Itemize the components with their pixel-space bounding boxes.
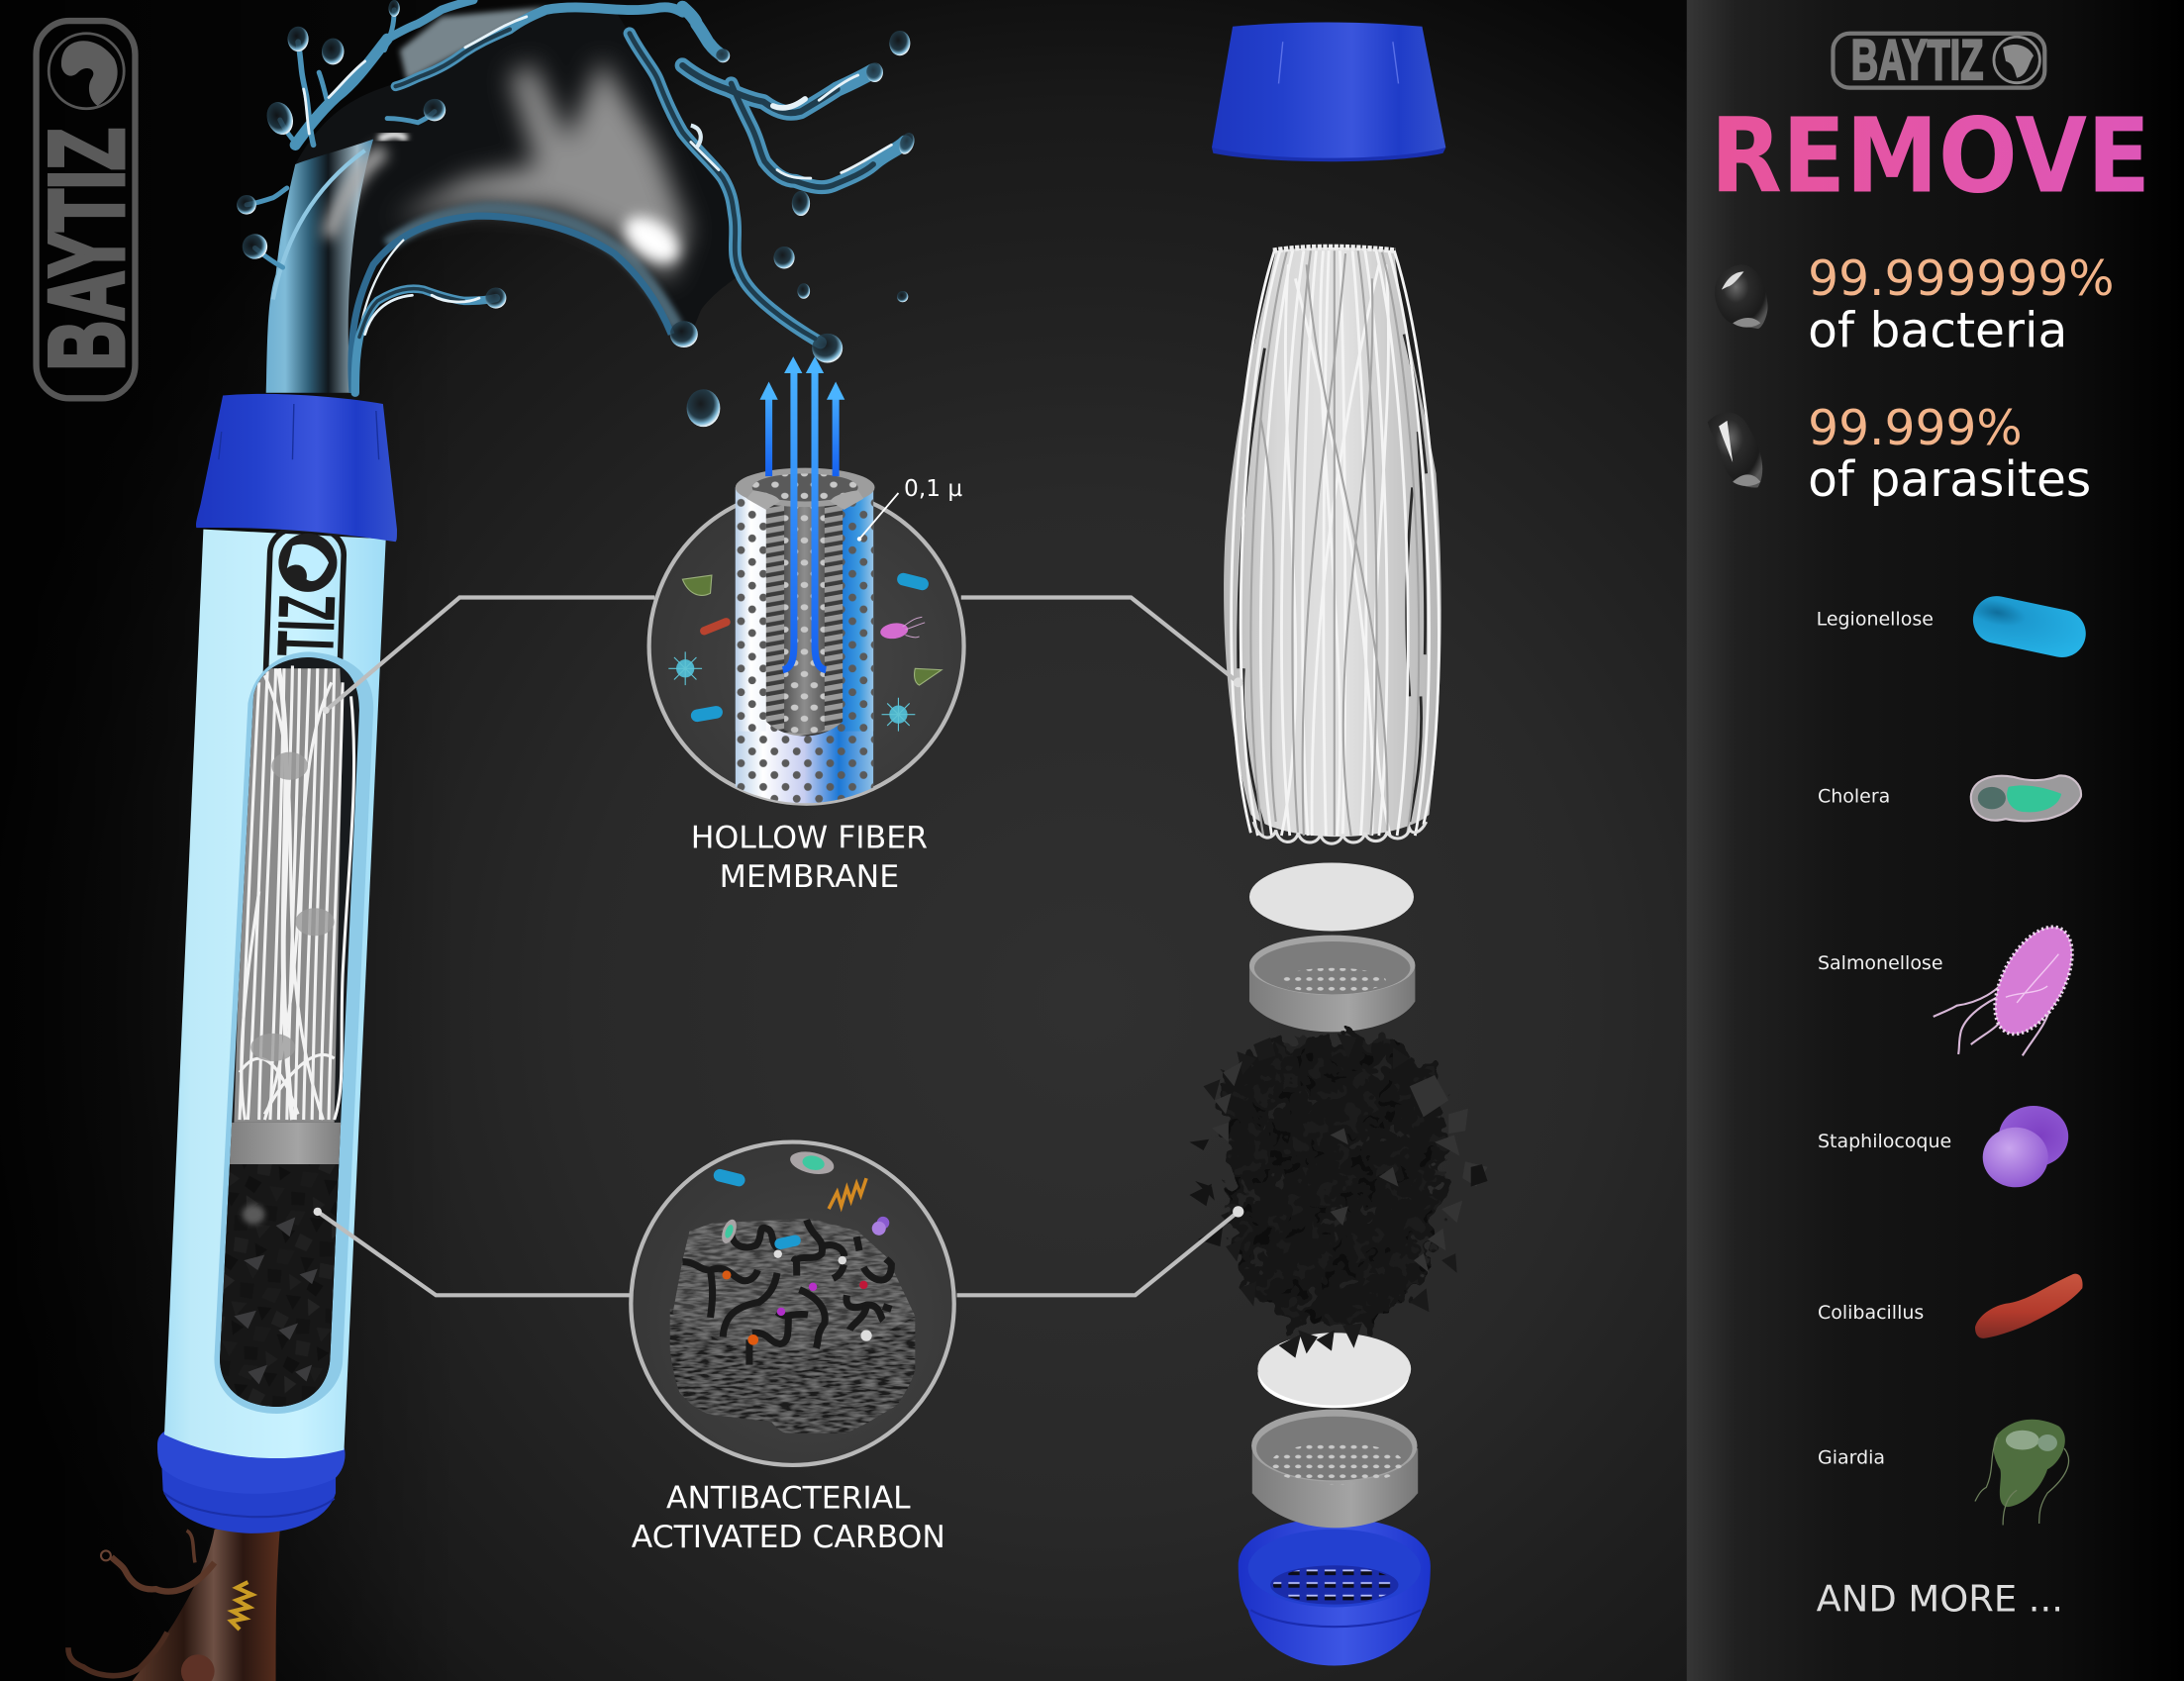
item: Cholera [1818, 775, 2081, 821]
exploded view: lower gray filter ring [1251, 1410, 1418, 1528]
tube logo: TIZ [260, 594, 352, 658]
label: hollow fiber membrane: MEMBRANE [720, 859, 899, 895]
logo: vertical BAYTIZ badge: BAYTIZ [27, 128, 146, 370]
item: Legionellose: Legionellose [1817, 609, 1934, 631]
callout lines: hollow fiber [323, 598, 1243, 714]
carbon lump [670, 1219, 915, 1434]
icons: microbes and contaminant particles [712, 1148, 889, 1345]
logo: top right BAYTIZ badge: BAYTIZ [1851, 29, 1983, 92]
brown dirty water stream [68, 1530, 280, 1681]
exploded view: blue cap [1212, 23, 1445, 161]
icon: giardia [1975, 1420, 2069, 1525]
callout lines: carbon [314, 1206, 1243, 1295]
tube cut-away window [209, 651, 373, 1415]
icon: salmonella [1934, 915, 2088, 1055]
icon: staphylococcus [1983, 1106, 2068, 1187]
text: parasites removal rate: of parasites [1808, 452, 2091, 508]
window gray ring [230, 1123, 341, 1164]
text: bacteria removal rate: of bacteria [1808, 303, 2067, 358]
icon: cholera [1971, 775, 2081, 821]
item: Giardia [1818, 1420, 2069, 1525]
window fibers [234, 665, 354, 1123]
water splash [237, 0, 917, 427]
circle: hollow fiber membrane detail [649, 468, 964, 808]
tube cap [196, 394, 397, 542]
water tendrils [247, 0, 905, 393]
icon: water drop 2 [1708, 412, 1762, 488]
item: Salmonellose: Salmonellose [1818, 952, 1943, 974]
icon: water drop 1 [1715, 264, 1768, 329]
exploded view: upper white disc [1249, 863, 1414, 931]
heading: REMOVE: REMOVE [1711, 95, 2150, 216]
exploded view: lower white disc [1257, 1333, 1411, 1408]
label: antibacterial activated carbon: ANTIBACTERIAL [666, 1481, 911, 1517]
item: Staphilocoque: Staphilocoque [1818, 1131, 1951, 1152]
label: antibacterial activated carbon: ACTIVATED CARBON [632, 1520, 945, 1555]
label: 0,1 micron: 0,1 µ [904, 475, 962, 502]
exploded view: blue bottom cup [1239, 1518, 1431, 1666]
label: hollow fiber membrane: HOLLOW FIBER [691, 821, 928, 856]
text: and more: AND MORE ... [1817, 1578, 2063, 1621]
exploded view: upper gray filter ring [1249, 936, 1415, 1032]
item: Giardia: Giardia [1818, 1447, 1885, 1469]
tube bottom blue thread [157, 1431, 346, 1533]
text: bacteria removal rate: 99.999999% [1808, 251, 2115, 307]
item: Staphilocoque [1818, 1106, 2068, 1187]
circle: activated carbon detail [631, 1142, 954, 1465]
right panel background [1687, 0, 2184, 1681]
text: parasites removal rate: 99.999% [1808, 401, 2023, 456]
icons: microbes around the fiber [668, 571, 942, 732]
window carbon [220, 1164, 339, 1407]
item: Salmonellose [1818, 915, 2088, 1055]
item: Cholera: Cholera [1818, 785, 1890, 807]
tube body [164, 530, 386, 1458]
item: Colibacillus [1818, 1274, 2083, 1338]
icon: legionella [1968, 592, 2090, 661]
icon: colibacillus [1975, 1274, 2083, 1338]
item: Colibacillus: Colibacillus [1818, 1302, 1924, 1324]
exploded view: hollow fiber bundle [1224, 247, 1441, 843]
fiber tube cross-section [736, 468, 875, 808]
tube logo [260, 528, 352, 740]
icon: spiral bacteria in dirty water [232, 1582, 252, 1630]
filter tube [157, 394, 397, 1533]
item: Legionellose [1817, 592, 2090, 661]
arrows: clean water flowing up [759, 356, 844, 670]
carbon pores [682, 1220, 891, 1365]
exploded view: activated carbon granules [1189, 1034, 1488, 1358]
